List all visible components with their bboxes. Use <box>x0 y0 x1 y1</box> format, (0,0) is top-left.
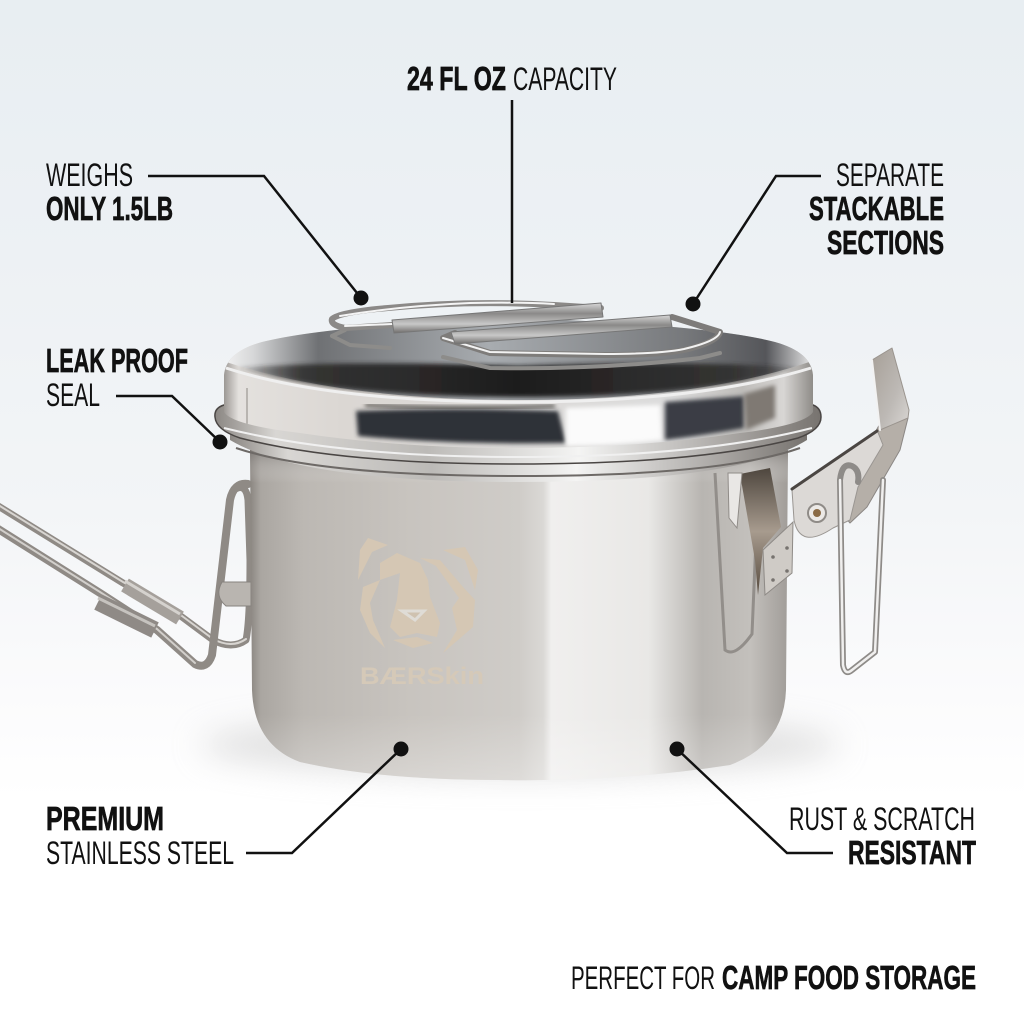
bear logo engraving <box>358 538 484 690</box>
callout: capacity: CAPACITY <box>513 61 617 97</box>
top handles <box>332 303 720 368</box>
callout: stackable sections: STACKABLE <box>809 190 944 227</box>
callout: leak proof seal <box>46 342 228 450</box>
callout: weight: WEIGHS <box>46 157 133 193</box>
callout: stackable sections <box>686 157 944 312</box>
callout: leak proof seal: LEAK PROOF <box>46 342 188 379</box>
callout: premium stainless steel: PREMIUM <box>46 800 164 837</box>
callout: rust and scratch resistant <box>670 742 976 871</box>
lid reflections <box>234 363 799 397</box>
lid ring <box>215 405 821 464</box>
left folding handle <box>0 484 251 666</box>
footer tagline: PERFECT FOR <box>571 960 715 996</box>
callout: premium stainless steel: STAINLESS STEEL <box>46 835 234 871</box>
lower body ring <box>230 430 807 482</box>
lid dome <box>228 320 808 400</box>
callout: weight <box>46 157 368 306</box>
footer tagline <box>571 959 976 996</box>
lid <box>224 320 813 448</box>
callout: stackable sections: SEPARATE <box>836 157 944 193</box>
callout: weight: ONLY 1.5LB <box>46 190 173 227</box>
right latch <box>792 348 909 672</box>
callout: leak proof seal: SEAL <box>46 377 100 413</box>
bear logo engraving: BÆRSkin <box>360 663 484 690</box>
pot body <box>250 450 788 780</box>
callout: capacity <box>407 60 617 303</box>
callout: stackable sections: SECTIONS <box>827 224 944 261</box>
product photo: stainless steel container <box>0 300 909 780</box>
callout: premium stainless steel <box>46 742 408 871</box>
callout: capacity: 24 FL OZ <box>407 60 506 97</box>
right clasp bracket on body <box>715 468 793 652</box>
